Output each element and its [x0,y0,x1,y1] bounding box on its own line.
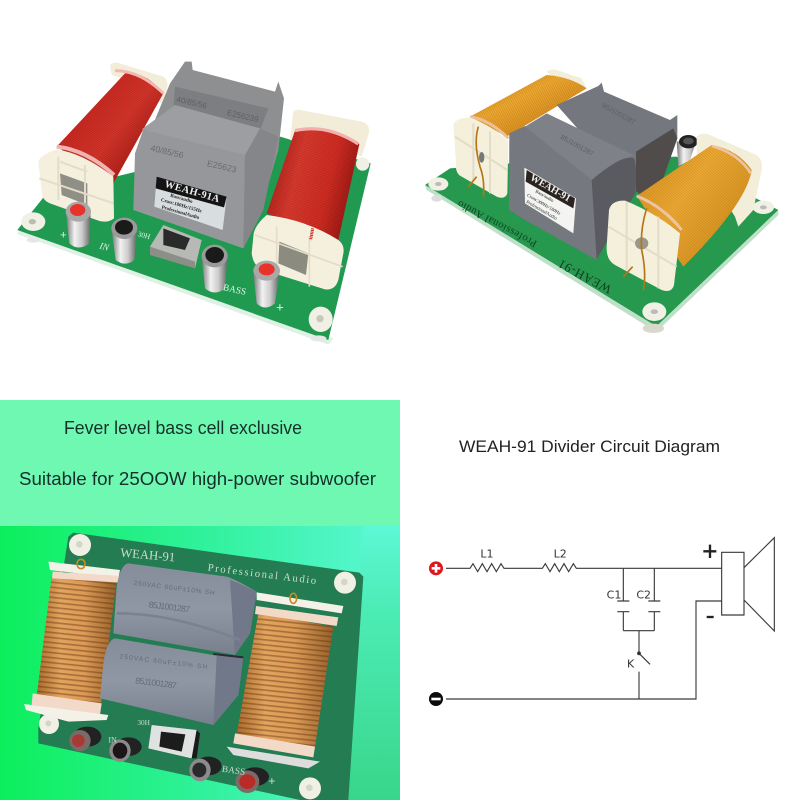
capacitors [509,83,677,260]
capacitors [133,62,284,248]
label L1: L1 [480,548,493,561]
terminal: black input [109,737,142,762]
board text: 30H: 30H [137,718,151,727]
label line one: Bass/audio [169,194,193,205]
left red coil [38,63,167,222]
plus sign [703,545,716,558]
photo: top view crossover [24,533,363,800]
board text: plus: + [268,774,275,788]
switch K [639,631,650,699]
capacitor marking back: 40/85/56 [176,95,208,111]
board text: WEAH-91: WEAH-91 [120,546,176,564]
capacitor upper [113,563,257,655]
left copper coil [24,559,121,722]
capacitor code lower: 85J1001287 [135,675,177,690]
capacitor code: 85J1001287 [559,134,595,158]
terminal: black bass minus [202,245,228,292]
circuit diagram title: WEAH-91 Divider Circuit Diagram [459,437,720,456]
switch [150,225,202,268]
circuit diagram [429,538,774,706]
terminal [677,135,698,167]
capacitor marking front: 40/85/56 [150,143,185,160]
speaker [722,538,774,631]
board text: WEAH-91: WEAH-91 [556,257,614,296]
capacitor text lower: 250VAC 60uF±10% SH [119,653,208,671]
minus sign [707,613,714,620]
circuit board [17,137,371,345]
board shadow [345,526,400,800]
right red coil [252,110,369,289]
label L2: L2 [554,548,567,561]
board text: plus: + [60,229,67,241]
board text: BASS: BASS [222,283,247,298]
terminal: red input [69,727,101,751]
capacitor label [154,177,227,230]
circuit board [425,157,778,333]
label C2: C2 [636,589,651,602]
headline line one: Fever level bass cell exclusive [64,418,302,438]
positive wire with inductors [446,564,722,572]
label title: WEAH-91A [163,179,221,205]
board text: bass plus: + [276,300,284,315]
capacitor text upper: 250VAC 60uF±10% SH [133,580,215,597]
label title: WEAH-91 [528,172,572,204]
board text: IN: IN [97,241,111,254]
capacitor code front: E25623 [206,158,238,175]
panel: green promo [0,400,400,800]
terminal: red bass plus [253,261,280,307]
right copper coil [227,592,343,768]
label K: K [627,658,635,671]
positive terminal [429,561,443,575]
capacitor code upper: 85J1001287 [148,599,191,614]
right gold coil [607,134,762,291]
switch pivot [638,652,640,655]
label line three: ProfessionalAudio [161,205,200,221]
capacitor lower [100,638,243,725]
switch [148,725,200,758]
board text: 30H: 30H [137,229,152,241]
headline line two: Suitable for 25OOW high-power subwoofer [19,469,376,489]
board text: Professional Audio: Professional Audio [207,563,317,587]
terminal: black input minus [111,218,137,264]
green headline band [0,400,400,526]
capacitors C1 C2 [617,568,660,631]
terminal: red input plus [66,202,91,247]
negative terminal [429,692,443,706]
gradient backdrop [0,526,400,800]
board text: BASS: BASS [221,765,246,778]
board text: IN: IN [108,736,117,745]
capacitor code back: 85J1001287 [601,102,636,126]
capacitor label [524,168,576,233]
board text: Professional Audio: Professional Audio [456,198,539,249]
left gold coil [453,69,587,198]
label C1: C1 [607,589,621,602]
terminal: black bass [189,757,222,781]
photo: WEAH-91 gold coil crossover [425,69,778,333]
terminal: red bass [235,767,269,793]
capacitor code back: E256239 [226,108,260,124]
photo: WEAH-91A red coil crossover [17,62,371,345]
label line one: Bass/audio [534,189,555,204]
circuit board [38,533,363,800]
label line three: ProfessionalAudio [525,200,558,222]
label line two: Cross:300Hz/180Hz [526,193,561,217]
negative wire [446,601,722,699]
label line two: Cross:180Hz/155Hz [160,198,203,215]
